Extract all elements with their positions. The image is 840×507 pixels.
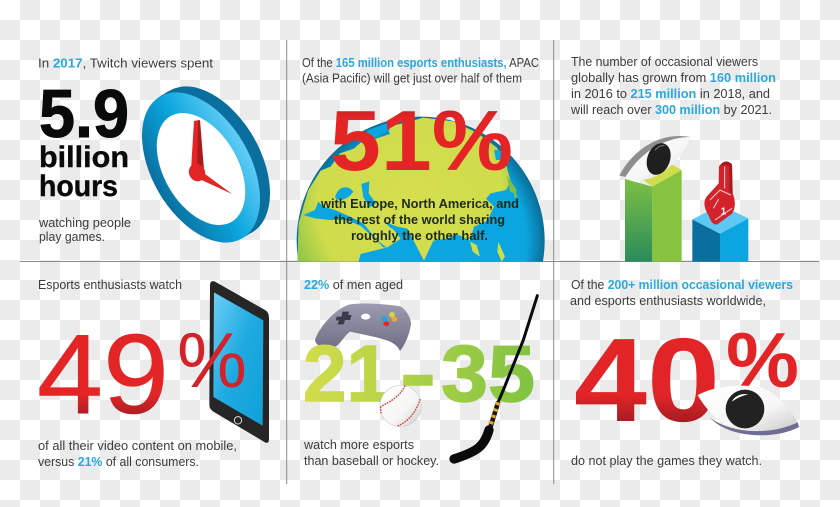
icon: clock bbox=[118, 66, 294, 263]
big number 49%: % bbox=[177, 316, 247, 404]
big number 21-35: 21 bbox=[303, 329, 390, 418]
intro text: Of the 200+ million occasional viewers bbox=[571, 278, 793, 292]
big number 21-35 bbox=[303, 329, 535, 418]
panel: occasional viewers growth: globally has grown from 160 million bbox=[571, 71, 776, 85]
panel: 40% do not play: and esports enthusiasts worldwide, bbox=[570, 294, 766, 308]
bar chart illustration bbox=[619, 136, 748, 262]
panel: 40% do not play bbox=[570, 278, 799, 468]
icon: foam finger: 1 bbox=[721, 206, 727, 217]
caption bbox=[38, 216, 131, 244]
panel: occasional viewers growth bbox=[570, 55, 776, 262]
blue bar bbox=[692, 205, 748, 262]
big number 21-35: 35 bbox=[441, 329, 535, 418]
caption: the rest of the world sharing bbox=[334, 213, 505, 227]
billion hours: billion bbox=[39, 141, 129, 174]
caption: with Europe, North America, and bbox=[320, 197, 519, 211]
intro text: Esports enthusiasts watch bbox=[38, 278, 182, 292]
panel: 51% APAC bbox=[296, 58, 545, 262]
caption: watching people bbox=[38, 216, 131, 230]
panel: men aged 21-35 bbox=[303, 278, 537, 468]
icon: baseball bbox=[380, 385, 421, 427]
big number 40% bbox=[574, 314, 799, 447]
intro text: In 2017, Twitch viewers spent bbox=[38, 56, 214, 70]
big number 49%: 49 bbox=[37, 311, 169, 437]
big number 49% bbox=[37, 311, 247, 437]
big number 40%: 40 bbox=[574, 314, 720, 447]
caption: of all their video content on mobile, bbox=[38, 439, 237, 453]
billion hours bbox=[39, 141, 129, 203]
panel: men aged 21-35: than baseball or hockey. bbox=[304, 454, 439, 468]
intro text: The number of occasional viewers bbox=[571, 55, 758, 69]
intro text: 22% of men aged bbox=[304, 278, 403, 292]
panel: 51% APAC: (Asia Pacific) will get just over half of them bbox=[302, 72, 522, 86]
icon: eye bbox=[619, 136, 691, 180]
intro text: Of the 165 million esports enthusiasts, APAC bbox=[302, 56, 539, 70]
globe bbox=[296, 116, 545, 262]
panel: 49% mobile: versus 21% of all consumers. bbox=[38, 455, 199, 469]
panel: occasional viewers growth: in 2016 to 215 million in 2018, and bbox=[571, 87, 770, 101]
big number 5.9: 5.9 bbox=[39, 76, 129, 152]
icon: game controller bbox=[315, 304, 411, 351]
big number 40%: % bbox=[726, 316, 799, 404]
caption bbox=[320, 197, 519, 243]
panel: 5.9 billion hours bbox=[38, 56, 294, 263]
big number 51%: 51% bbox=[330, 94, 513, 189]
panel: 49% mobile bbox=[37, 278, 269, 469]
caption: roughly the other half. bbox=[351, 229, 488, 243]
icon: tablet bbox=[209, 281, 269, 443]
icon: hockey stick bbox=[454, 296, 537, 459]
caption: play games. bbox=[39, 230, 105, 244]
icon: eye bbox=[698, 386, 799, 435]
panel: occasional viewers growth: will reach over 300 million by 2021. bbox=[570, 103, 772, 117]
caption: do not play the games they watch. bbox=[571, 454, 762, 468]
green bar bbox=[625, 164, 682, 262]
caption: watch more esports bbox=[303, 438, 414, 452]
big number 21-35: - bbox=[400, 329, 436, 418]
billion hours: hours bbox=[39, 170, 118, 203]
